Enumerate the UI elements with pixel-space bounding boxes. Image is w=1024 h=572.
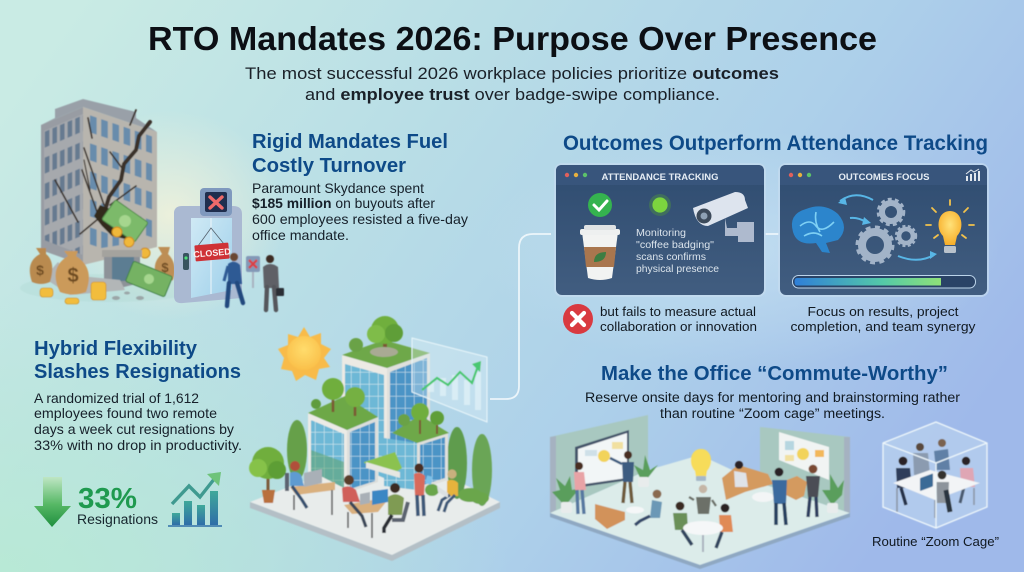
orange sofa <box>722 465 807 500</box>
banknotes on ground <box>125 261 173 297</box>
icon: security camera <box>693 192 754 242</box>
text: hybrid body: 33% with no drop in productivity. <box>34 437 242 453</box>
text: commute-worthy body: Reserve onsite days for mentoring and brainstorming rather <box>585 390 961 405</box>
money bag center <box>56 251 89 294</box>
text: focus on results: completion, and team synergy <box>790 320 976 334</box>
seated woman left <box>635 490 662 525</box>
text: hybrid body <box>34 390 242 453</box>
subtitle: and employee trust over badge-swipe compliance. <box>305 86 720 104</box>
back meeting people <box>913 439 950 475</box>
floor <box>550 455 850 565</box>
connector line <box>490 234 779 399</box>
illustration: cracked office building with money <box>20 99 200 304</box>
closed sign: CLOSED <box>193 246 232 260</box>
text: focus on results <box>790 305 976 334</box>
light bulb <box>691 449 711 481</box>
lower left roof garden <box>308 378 378 430</box>
red X box <box>200 188 232 216</box>
money bag left: $ <box>36 262 44 278</box>
text: fails to measure: but fails to measure actual <box>600 305 756 319</box>
worker in red shirt <box>342 475 366 527</box>
money bag right: $ <box>161 260 169 275</box>
lower left block right face <box>347 417 378 493</box>
potted tree <box>249 447 286 503</box>
round table <box>683 521 723 535</box>
panel: attendance tracking <box>554 163 766 297</box>
falling banknote <box>102 200 148 242</box>
people walking to gate <box>224 253 284 310</box>
text: rigid mandates body: 600 employees resisted a five-day <box>252 211 468 227</box>
money bag left <box>30 248 52 284</box>
window dots <box>565 173 587 177</box>
text: hybrid body: employees found two remote <box>34 405 217 421</box>
plants <box>552 455 844 506</box>
building cracks <box>55 110 150 234</box>
man in dark blazer <box>806 465 820 517</box>
no entry sign <box>246 256 260 288</box>
heading: outcomes outperform: Outcomes Outperform Attendance Tracking <box>563 132 988 155</box>
front person with laptop <box>920 471 950 512</box>
desk left <box>290 469 335 515</box>
icon: growth chart <box>168 472 222 526</box>
building right face <box>83 107 157 265</box>
meeting table <box>893 470 980 500</box>
text: commute-worthy body <box>585 390 961 421</box>
cage outline <box>883 422 987 528</box>
crack hole <box>94 205 136 240</box>
shrubs <box>425 484 489 504</box>
text: rigid mandates body: $185 million on buyouts after <box>252 195 435 211</box>
text: hybrid body: A randomized trial of 1,612 <box>34 390 199 406</box>
person in grey suit <box>263 255 284 310</box>
lower left block left face <box>308 413 347 493</box>
icon: red X circle <box>563 304 593 334</box>
coin stacks <box>40 282 106 304</box>
standing elder <box>689 485 716 514</box>
sofa woman <box>734 461 748 487</box>
whiteboard screen <box>575 430 629 488</box>
worker red hair <box>285 461 307 508</box>
text: rigid mandates body: Paramount Skydance spent <box>252 180 424 196</box>
heading: rigid mandates: Rigid Mandates Fuel <box>252 131 448 153</box>
label: routine zoom cage: Routine “Zoom Cage” <box>872 535 999 549</box>
icon: green down arrow <box>34 477 71 527</box>
tower right face <box>387 353 430 480</box>
heading: hybrid flexibility <box>34 337 241 383</box>
left meeting person <box>896 457 912 505</box>
heading: hybrid flexibility: Slashes Resignations <box>34 360 241 383</box>
icon: closed turnstile gate <box>174 188 242 303</box>
text: commute-worthy body: than routine “Zoom cage” meetings. <box>660 406 885 421</box>
tower left face <box>342 355 387 480</box>
arrows <box>838 195 937 260</box>
icon: coffee cup <box>580 225 620 280</box>
wall poster <box>779 432 829 480</box>
small stones <box>112 292 144 300</box>
plant pots <box>561 477 838 513</box>
illustration: collaborative office room <box>550 415 850 569</box>
presenting woman <box>574 462 586 514</box>
panel heading: ATTENDANCE TRACKING <box>602 172 718 183</box>
text: rigid mandates body <box>252 180 468 243</box>
building left face <box>41 107 83 265</box>
worker standing with tablet <box>414 463 433 516</box>
left wall <box>550 415 648 513</box>
right block garden <box>392 403 449 443</box>
right block <box>417 433 448 490</box>
falling coins <box>112 227 150 258</box>
text: monitoring: scans confirms <box>636 251 706 263</box>
presenting man <box>610 451 634 503</box>
text: monitoring <box>636 227 719 275</box>
illustration: zoom cage <box>883 422 987 528</box>
money bag center: $ <box>67 265 79 287</box>
heading: rigid mandates: Costly Turnover <box>252 155 406 177</box>
desk right <box>344 489 390 538</box>
text: hybrid body: days a week cut resignations by <box>34 421 234 437</box>
text: monitoring: "coffee badging" <box>636 239 714 251</box>
text: monitoring: Monitoring <box>636 227 686 239</box>
text: fails to measure: collaboration or innovation <box>600 320 757 334</box>
worker in green shirt <box>384 483 408 533</box>
icon: small chart <box>966 169 980 181</box>
seated man at table <box>673 502 692 545</box>
building roof <box>41 99 157 132</box>
text: fails to measure <box>600 305 757 334</box>
progress bar <box>792 276 976 288</box>
money bag right <box>155 247 175 282</box>
right wall <box>760 427 850 513</box>
tower roof garden <box>342 316 430 368</box>
heading: commute-worthy: Make the Office “Commute-Worthy” <box>601 362 948 385</box>
icon: green check <box>588 193 612 217</box>
small table <box>626 506 644 514</box>
text: rigid mandates body: office mandate. <box>252 227 349 243</box>
right meeting person <box>960 457 975 503</box>
stat label: Resignations <box>77 512 158 527</box>
rubble <box>44 262 125 295</box>
platform <box>250 448 500 555</box>
stat: 33 percent: 33% <box>78 483 137 515</box>
panel heading: OUTCOMES FOCUS <box>838 172 930 183</box>
seated woman at table <box>716 504 733 548</box>
icon: brain <box>792 206 844 253</box>
entry awning <box>364 452 402 472</box>
window dots <box>789 173 811 177</box>
person in blue suit <box>224 253 243 306</box>
coffee table <box>752 492 774 502</box>
worker with laptop <box>437 469 458 512</box>
armchair <box>595 504 625 529</box>
text: monitoring: physical presence <box>636 263 719 275</box>
heading: rigid mandates <box>252 131 448 177</box>
title: RTO Mandates 2026: Purpose Over Presence <box>148 20 877 57</box>
icon: gears <box>857 199 916 263</box>
man in blue jacket <box>772 468 787 525</box>
entrance <box>104 252 140 290</box>
transparent growth chart <box>412 338 487 422</box>
icon: green status light <box>649 194 671 216</box>
tall tree left <box>287 420 492 506</box>
subtitle: The most successful 2026 workplace policies prioritize outcomes <box>245 65 779 83</box>
icon: sun <box>278 327 331 381</box>
icon: light bulb <box>926 200 974 253</box>
subtitle <box>245 65 779 104</box>
illustration: green office building with workers <box>249 316 500 561</box>
panel: outcomes focus <box>778 163 989 297</box>
text: focus on results: Focus on results, project <box>808 305 959 319</box>
heading: hybrid flexibility: Hybrid Flexibility <box>34 337 198 360</box>
